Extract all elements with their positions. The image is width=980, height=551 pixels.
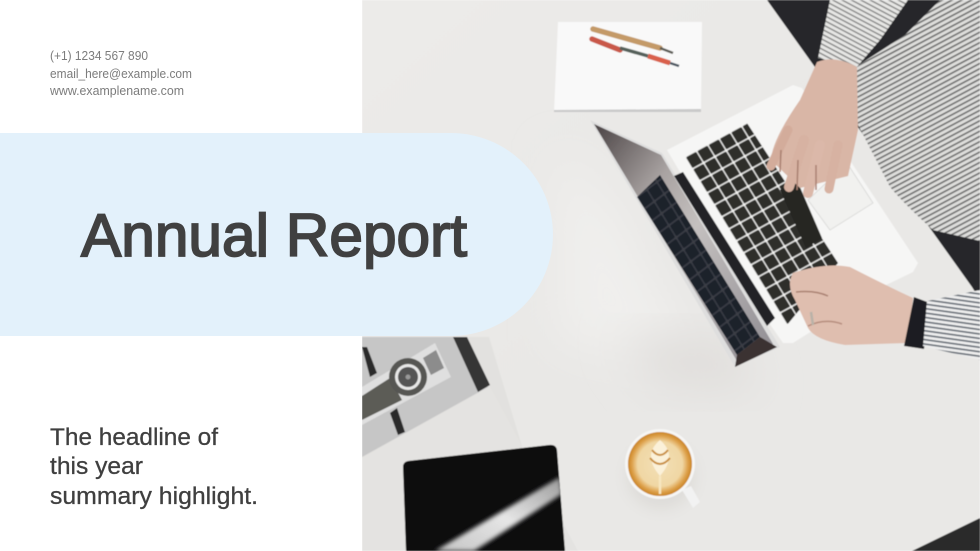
soft shadow below laptop — [652, 341, 717, 376]
remote control — [362, 343, 451, 425]
email: email_here@example.com — [50, 66, 192, 81]
title: Annual Report — [81, 202, 467, 269]
dark floor behind desk — [767, 0, 980, 300]
lower white panel — [438, 449, 522, 459]
notepad — [554, 22, 702, 112]
trackpad — [808, 163, 873, 230]
coffee cup — [625, 429, 700, 509]
headline summary — [50, 424, 258, 510]
headline line 3: summary highlight. — [50, 483, 258, 510]
upper hand — [771, 59, 858, 193]
grey tray under remote — [362, 336, 491, 457]
photo: desk with laptop, hands, notepad, coffee and tablet — [362, 0, 980, 551]
striped cuff — [923, 290, 980, 360]
laptop base — [667, 85, 918, 343]
wristwatch — [904, 297, 930, 349]
phone: (+1) 1234 567 890 — [50, 48, 148, 63]
pale blue title banner — [0, 133, 553, 336]
laptop screen lid — [590, 120, 780, 367]
light patch on desk left of laptop — [560, 150, 700, 370]
headline line 1: The headline of — [50, 424, 218, 451]
lower hand — [790, 265, 913, 345]
dark desk corner — [912, 518, 980, 551]
headline line 2: this year — [50, 453, 143, 480]
laptop hinge — [674, 172, 775, 326]
pens on notepad — [592, 29, 679, 66]
striped shirt — [857, 0, 980, 241]
desk surface — [362, 0, 980, 551]
laptop keyboard — [685, 123, 838, 325]
upper sleeve — [818, 0, 908, 68]
tablet — [403, 445, 565, 551]
contact details — [49, 48, 192, 98]
website: www.examplename.com — [49, 83, 184, 98]
